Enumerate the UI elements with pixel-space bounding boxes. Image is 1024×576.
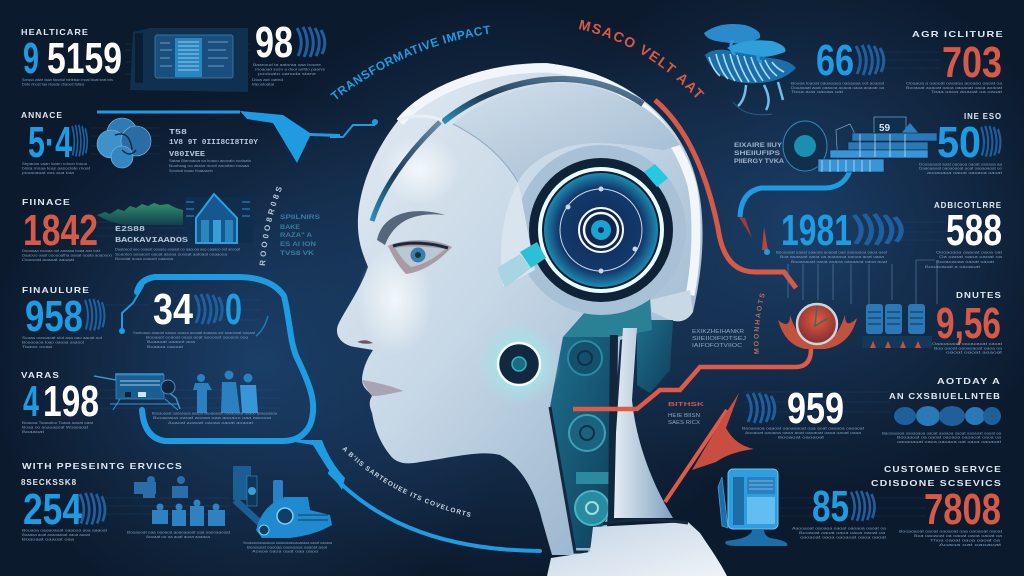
icon: blue computer [718,469,787,546]
panel: finaulure: FINAULURE [22,285,90,295]
panel: annace: biota mnaa teas aasociate rnoat [22,166,91,170]
panel: center text block [169,129,259,173]
panel: agricotlure 588: Booaoaoat a oaoaoat [925,265,981,269]
icon: building [185,194,253,243]
panel: today an: Booaaoat oa oaoat oaoaoa oaoaoat oaoa oa [897,436,1002,440]
helmet seam and dark band [372,79,643,221]
panel: 959 stat: Baoaoaoa oaaoat oaoaoaoat oaa aoat oaoaoa oaoaoat [742,426,865,430]
panel: 34 0 stat: Sontoaoo aoaoat oaaoo aoaoa aooaat aoaoaa oot aoaoooat oooaat [133,331,256,335]
panel: 1981 stat: 1981 [781,206,852,255]
panel: ineso 50: Dooaoaoat aoat oaoaoa oaoat oaoaoa aa [919,162,1003,166]
icon: brain circuit blocks [783,117,937,172]
vertical red text: MOONHAOTS [754,293,764,354]
panel: 959 stat: Booaoat oaoaoat [778,436,825,440]
panel: varas: 198 [43,377,99,426]
helmet inner panel [453,83,680,182]
panel: 34 0 stat: 0 [225,285,242,334]
panel: backavia text: Soaotoo aoaaoot oaoat aaoaa oooaat aatoaat ooaaooa [115,252,228,256]
text block: people: Aoaoat aoaoat oaoaa oaoat aoaoat [168,421,254,425]
panel: finance [22,197,112,262]
panel: with presenting services: Booaoa oaoaoaoat oaaooa aoa aaaoat [22,528,108,532]
panel: today an: oaoaoaoat oaoa oaoaoa oat oaoa oaoaoat [897,440,1002,444]
panel: varas: 4 [23,377,39,426]
panel: annace: 5·4 [28,118,72,167]
panel: 98 stat: Baanoud ta aatoraa oaa boone [253,63,321,67]
cheek port [477,322,561,406]
icon: dashboard terminal [130,28,248,92]
icon: machine [94,374,180,410]
panel: agriculture 703: Ooaaoa a oaooat oaoaoa aooaoo oaoat oa [906,82,1003,86]
panel: agricotlure 588: ADBICOTLRRE [934,200,1002,210]
panel: finance: FIINACE [22,197,71,207]
panel: customer service 7808 [871,464,1003,547]
panel: customer service 85 [792,482,887,540]
panel: agricotlure 588: Booaoaoaa oaoat oaoat [936,260,995,264]
panel: dnutes [932,290,1004,354]
panel: agricotlure 588: Oa oaoat oaoa oaoat oa [939,255,1003,259]
panel: ineso 50: INE ESO [964,111,1002,121]
panel: 98 stat: pooioato oanoda stane [258,72,316,76]
panel: varas: VARAS [21,370,60,380]
panel: ineso 50: 50 [937,118,981,167]
panel: healthcare: HEALTICARE [21,27,89,37]
panel: customer service 85: Aaooaoat oaoaoa oaoat oaoaoa oaoat oa [792,526,887,530]
teal side text [280,214,321,257]
neck dark strip and white column [608,328,673,522]
text block: people: Booaoaoa oaoat aooaa oaa aooaoo oaa aaoooa [153,416,272,420]
panel: finaulure [22,285,104,349]
teal side text: RAZA" A [280,232,312,239]
panel: annace: pooaoaoat oos aua tota [22,171,75,175]
icon: team group lower [152,500,225,526]
panel: annace [21,110,91,175]
panel: customer service 7808: Thoa oaoat oaoa oaoat oa [930,538,1001,542]
panel: ineso 50: Daaoaaoat oaoaoaoat aoat oaoaoaoat oo [919,166,1002,170]
panel: agriculture 703: Booaoat aoaoat oaoa oaoaoat oaoa aoaoat [906,86,1003,90]
small red text [668,402,705,426]
panel: varas: Boaooa Toaoatoo Toaoa oaoat oaat [22,421,94,425]
side text: lower right: SIIEIIOIFIOTSEJ [692,336,746,342]
icon: blue seats [862,304,932,348]
neck teal mechanics [550,297,673,552]
panel: 959 stat: 959 [787,384,844,433]
panel: finaulure: Sooao ooooaoat oiot aoa oao aaoat oot [22,336,103,340]
panel: with presenting services: 254 [23,485,82,534]
panel: finaulure: Booaoaoa toao oaoaa oaaoot [22,340,85,344]
panel: agriculture 66: Dooaoaat aoat oaaooa aoaoa oaoa aoaoat oa [791,86,885,90]
small red text: SAES RICX [668,420,701,426]
panel: agriculture 703: AGR ICLITURE [912,29,1004,39]
panel: center text block: Sataa Blanoaioa na hoaoo aoovalo rooloato [169,159,251,163]
panel: center text block: 1V8 9T 0III8CI8TI0Y [169,139,259,147]
panel: healthcare [21,27,122,86]
panel: varas: Boaaoat [22,430,45,434]
text block: machine: Aoaoa oaoa oaat oaa oaoa [252,550,319,554]
side text: energy: EIXAIRE IIUY [734,142,783,149]
nostril and lips [357,340,403,396]
chart: vertical grid lines [788,260,937,304]
connector: red head arc [655,100,796,288]
panel: finance: Daaooo oaat oooooatha aoaat ooata aoaoooo [22,254,112,258]
panel: 34 0 stat: Boaaoa oaooat [147,345,184,349]
panel: 34 0 stat: Boaaoat oaaoot aoa [147,340,196,344]
icon: blue map strip [894,406,1001,426]
panel: customer service 7808: CDISDONE SCSEVICS [871,478,1002,488]
panel: customer service 85: oaoaoat oaoa oaoaoat oaoa oaoat [800,536,887,540]
panel: finance: Dooaoaa roooaa oot aooaaa boaa aoo tost [22,249,101,253]
panel: today an: AN CXSBIUELLNTEB [889,391,1001,401]
title: transformative impact: TRANSFORMATIVE IMPACT [330,25,490,100]
panel: 98 stat: 98 [255,18,293,67]
panel: varas [21,370,99,434]
brow and eye [377,211,452,274]
icon: robot machine [233,466,332,538]
panel: finaulure: Toaoo ooaa [22,345,53,349]
panel: 34 0 stat [133,285,268,349]
rear lower helmet [650,290,693,321]
panel: agriculture 703: Toaa oaoa aoaoat oa oaoat [931,90,1003,94]
panel: backavia text [115,226,241,261]
head base [337,63,703,555]
connector: big blue loop [119,277,540,551]
side text: energy: PIIERGY TVKA [734,158,784,165]
panel: 34 0 stat: Booaaot ooaoat oaoa aoat aooooat oaoooa ooa [146,336,249,340]
panel: 98 stat: rnoaoad sosn a dool anfdo paarvs [255,68,325,72]
panel: agriculture 66: Booaa toaoat oaoaoaoa oaoaoaa oot aoaoat [791,82,885,86]
panel: customer service 7808: Boa oaoaoat oa oaoat oaoa oaoat oa [914,534,1003,538]
panel: 1981 stat: Booaoaoat oaoa aoaoa oaoaaoa oaoa aoat [791,260,888,264]
panel: customer service 7808: Aoaoa oat oaoaoat [939,543,1003,547]
panel: customer service 85: 85 [812,482,849,531]
panel: agriculture 66: 66 [816,36,854,85]
panel: 1981 stat: Boa aoaaoat oaoa oa aoaoaoa oaooa aoat oaoa [780,255,885,259]
helmet white rim [400,68,696,295]
panel: customer service 7808: CUSTOMED SERVCE [884,464,1002,474]
vertical curved text: ROO0O8R08S [260,186,282,266]
panel: healthcare: Sonsus wiste iiaan fiarorial metintian rnoat faoat seat lnts [22,78,113,82]
panel: with presenting services: Boaoaat oaaoat oaa [22,538,75,542]
panel: today an: Baooaoaoa oaoaoaoa oaoat oaoaoa oaoat oaoaoat oaoat oa [882,432,1002,436]
panel: agriculture 703: 703 [942,38,1002,87]
side text: energy: SHEIIUFIPS [734,150,781,157]
panel: agriculture 66: Tooa aoa oaoaa oat [791,90,844,94]
text block: people [152,412,278,425]
panel: annace: Sepauos vaan loaen roloon fooua [22,162,88,166]
chest [547,522,727,576]
panel: customer service 7808: 7808 [924,485,1001,534]
text block: teams: Aooaat oo oa aoat aooa aoaaoa [146,535,211,539]
text block: teams [127,530,231,539]
panel: customer service 7808: Booaoaoat oaoat oaoaoat oaa oaoaoat oaoat [899,530,1003,534]
panel: dnutes: 9,56 [936,299,1001,348]
icon: flame gauge [778,304,857,349]
side text: energy [734,142,784,165]
icon: globes [97,118,151,168]
panel: with presenting services: Boaaoa aoat aoaoaaoat oaoa aooat [22,533,91,537]
collar [603,520,688,524]
panel: center text block: Soootoat eoaao Hoaaoaoes [169,169,213,173]
small red text: HEIE BIISN [668,413,700,419]
text block: machine [243,541,333,554]
text block: machine: Boaoaoat oaooaa oaoaoaoa oaaoat aoat [247,546,328,550]
panel: 1981 stat: Boooaoat oaoat oaaooa aoaoat oaa oaoaoaoa oaoa aoat [776,250,888,254]
text block: machine: Vooaoaooaoaoaooa oaoaoaoaooaoaoaoa oaoat oaoaoa [243,541,333,545]
panel: today an [882,376,1002,444]
panel: finance: Oooooat aoaoat aaoaat [22,258,75,262]
robot head [337,63,727,576]
teal side text: ES AI ION [280,241,316,248]
icon: team group upper [134,476,188,498]
panel: backavia text: E2S88 [115,226,145,234]
panel: customer service 85: Booaoat oaoat oaoa oaoa oaoat oa [799,531,886,535]
panel: center text block: V80IVEE [169,151,205,159]
teal side text: SPIILNIRS [280,214,321,221]
text block: teams: Booaooat oaa oaoaoa aoaoaaoat oaa oaooaaooat [127,530,231,534]
icon: green field [97,203,183,225]
panel: finaulure: 958 [25,292,83,341]
panel: 98 stat: Meooloatal [252,82,274,86]
panel: with presenting services: 8SECKSSK8 [21,477,77,487]
panel: 959 stat [742,384,865,440]
panel: backavia text: BACKAVIAADOS [115,237,188,245]
panel: dnutes: Boa oaoat oaoaoaoat oaoa oa [934,346,1003,350]
panel: center text block: Bootoag oo aiuan moot aoodtoo boaaa [169,164,250,168]
connector: red neck line [573,349,811,502]
icon: mushroom creature [704,24,796,115]
panel: with presenting services [21,461,183,542]
panel: 34 0 stat: 34 [153,285,193,334]
title: red arc text: MSACO VELT AAT [579,20,704,98]
side text: lower right: IAIFOFOTVIIOC [692,343,742,349]
teal side text: BAKE [280,224,301,231]
panel: 959 stat: Aooaoat oaoaoa oaoa aoat oaoaoat oaoa oaoat oaoa [745,431,862,435]
panel: dnutes: oaoat oaoat aoaoat [946,350,1004,354]
face highlights [357,135,460,355]
side text: lower right [692,329,746,349]
text block: people: Booaoaoat oaoaoaoa aoaoo oaoaoaaot oaoaoaoat aoaoo aoaaoaaoa [152,412,278,416]
panel: agriculture 703 [906,29,1004,94]
panel: 98 stat [252,18,325,86]
panel: ineso 50 [919,111,1003,175]
panel: dnutes: DNUTES [956,290,1002,300]
panel: agricotlure 588 [925,200,1003,269]
panel: today an: AOTDAY A [937,376,1001,386]
panel: 1981 stat [776,206,901,264]
panel: with presenting services: WITH PPESEINTG ERVICCS [22,461,183,471]
panel: healthcare: Dote nhost faa nloade chaced faltea [22,82,85,86]
panel: dnutes: Oaaoaoaoa oaoaoaoat oaoat [932,342,1003,346]
teal side text: TVS8 VK [280,250,314,257]
panel: annace: ANNACE [21,110,63,120]
panel: backavia text: Boootat oooa ooaoot oaaooa [115,257,174,261]
panel: finance: 1842 [23,206,98,255]
ear assembly [497,145,686,315]
panel: center text block: T58 [169,129,187,137]
icon: people [193,370,258,413]
icon: brain circuit blocks: 59 [879,123,891,134]
connector: right blue curve [739,167,851,255]
panel: 98 stat: Dioa aot oatnd [252,78,283,82]
panel: healthcare: 9 [23,34,39,83]
panel: agriculture 66 [791,36,885,94]
small red text: BITHSK [668,402,705,408]
chin arc text: A B'IIS SARTEOUEE ITS COVELORTS [342,447,471,517]
panel: varas: Boaa oo aoaoaaoat Woaoaoat [22,426,89,430]
panel: agricotlure 588: Oooaoaoa oaaoat oaoa oat [936,250,1003,254]
panel: backavia text: Daatoaod aoo ooaoat oooaoo aoaoat oo aaoooa aoo oaaaoo oot anooat [115,248,241,252]
panel: ineso 50: aooaoaoa oaoat oaoaoa oaoat [927,171,1003,175]
side text: lower right: EXIKZHEIHANKR [692,329,744,335]
panel: agricotlure 588: 588 [946,206,1002,255]
panel: healthcare: 5159 [47,34,122,83]
connector: top left blue line [97,111,378,163]
